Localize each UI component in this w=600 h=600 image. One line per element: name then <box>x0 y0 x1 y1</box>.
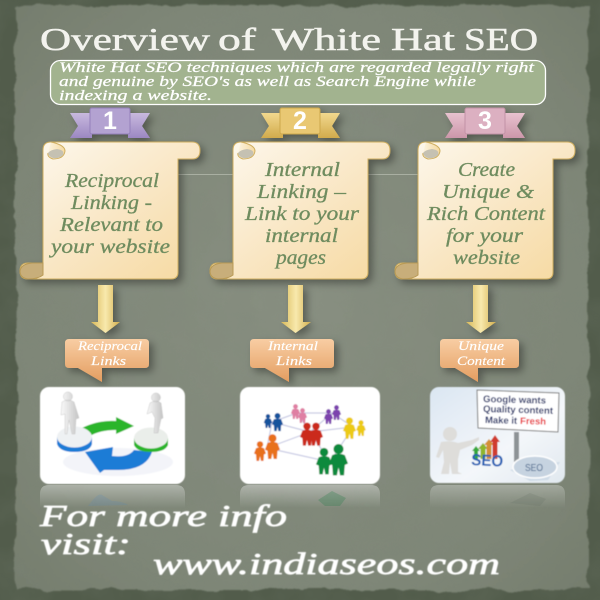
callout 3 <box>440 338 519 382</box>
sign post <box>514 432 519 462</box>
scroll 2 text: internal <box>265 225 338 247</box>
arrow 2 <box>281 285 311 333</box>
footer text: visit: <box>41 526 131 561</box>
title: Hat <box>391 21 455 57</box>
footer text: For <box>39 498 106 533</box>
blue arrow <box>85 447 152 473</box>
title: White <box>272 21 381 57</box>
figures green <box>316 444 348 475</box>
title <box>40 21 538 57</box>
scroll 2 shape <box>210 142 390 279</box>
footer text: more <box>116 498 207 533</box>
callout 1 <box>65 338 149 382</box>
figures pink <box>291 404 307 423</box>
ribbon badge 2 <box>261 107 340 138</box>
sign board: Make it <box>485 415 518 427</box>
scroll 2 text: Link to your <box>244 203 359 225</box>
scroll 3 text: Rich Content <box>426 203 545 225</box>
scroll 3 text: for your <box>446 225 523 247</box>
network lines <box>267 413 353 462</box>
sign board <box>477 390 559 432</box>
scroll 2 <box>210 142 390 279</box>
scroll 1 text: your website <box>49 236 170 258</box>
callout 3: Content <box>457 353 505 368</box>
presenter figure <box>436 427 479 474</box>
scroll 1 <box>20 142 200 279</box>
scroll 2 text: pages <box>274 247 326 269</box>
title: of <box>218 21 256 57</box>
scroll 3 text: Create <box>458 159 515 181</box>
scroll 2 text <box>244 159 359 269</box>
figures yellow <box>343 417 366 439</box>
callout 1: Links <box>90 353 126 368</box>
image 1: reciprocal links <box>40 387 185 484</box>
left figure <box>61 392 79 434</box>
arrow 1 <box>91 285 120 333</box>
intro callout box: indexing a website. <box>59 88 212 104</box>
footer text <box>39 498 500 581</box>
ribbon badge 1: 1 <box>103 107 117 135</box>
SEO 3D text: SEO <box>471 452 504 471</box>
title: Overview <box>40 21 210 57</box>
right figure <box>147 393 163 433</box>
ribbon badge 2: 2 <box>293 107 307 135</box>
scroll 1 text <box>49 170 170 258</box>
image 2: internal links network <box>240 387 380 484</box>
SEO badge: SEO <box>525 463 543 474</box>
footer text: info <box>218 498 287 533</box>
ribbon badge 3 <box>445 107 525 138</box>
callout 2 <box>250 338 334 382</box>
reflection 3 <box>430 485 565 508</box>
scroll 2 text: Linking – <box>256 181 347 203</box>
figures purple <box>324 405 341 424</box>
reflection 2 <box>240 485 380 508</box>
scroll 2 text: Internal <box>264 159 341 181</box>
ribbon badge 1 <box>70 107 150 138</box>
callout 2: Internal <box>267 338 318 353</box>
callout 2: Links <box>275 353 312 368</box>
arrow 3 <box>466 285 496 333</box>
title: SEO <box>464 21 538 57</box>
intro callout box <box>50 60 546 104</box>
callout 1: Reciprocal <box>77 338 142 353</box>
scroll 1 text: Linking - <box>70 192 152 214</box>
scroll 3 text: website <box>453 247 520 269</box>
scroll 3 text <box>426 159 545 269</box>
left platform <box>57 437 92 452</box>
scroll 1 text: Reciprocal <box>64 170 159 192</box>
sign board: Fresh <box>520 416 546 428</box>
growth arrows <box>472 435 500 459</box>
scroll 3 <box>395 142 575 279</box>
ribbon badge 3: 3 <box>478 107 492 135</box>
scroll 1 shape <box>20 142 200 279</box>
scroll 3 text: Unique & <box>442 181 535 203</box>
figures red <box>300 423 323 446</box>
reflection 1 <box>40 485 185 508</box>
scroll 1 text: Relevant to <box>59 214 163 236</box>
figures blue <box>264 413 283 431</box>
sign board: Quality content <box>483 404 554 417</box>
right platform <box>134 438 168 452</box>
sign board: Google wants <box>483 394 546 407</box>
scroll 3 shape <box>395 142 575 279</box>
intro callout box: White Hat SEO techniques which are regarded legally right <box>59 60 535 76</box>
intro callout box: and genuine by SEO's as well as Search Engine while <box>59 74 477 90</box>
connector lines <box>178 174 418 176</box>
image 3: unique content <box>430 387 565 483</box>
green arrow <box>82 417 134 436</box>
footer text: www.indiaseos.com <box>153 546 500 581</box>
callout 3: Unique <box>458 338 504 353</box>
figures orange <box>254 434 280 461</box>
